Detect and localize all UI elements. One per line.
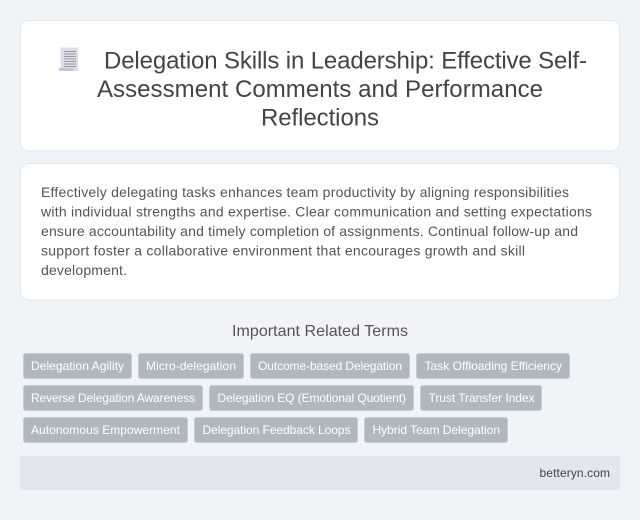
tag: Task Offloading Efficiency: Task Offloading Efficiency [424, 359, 562, 373]
tag: Hybrid Team Delegation [364, 418, 508, 442]
tag: Outcome-based Delegation [250, 354, 410, 378]
icon: document scroll [59, 48, 78, 71]
heading: important related terms: Important Related Terms [232, 323, 408, 340]
footer: site name: betteryn.com [540, 466, 610, 480]
text block: description: with individual strengths and expertise. Clear communication and setting expectations [40, 204, 592, 220]
tag: Delegation Agility: Delegation Agility [31, 359, 124, 373]
tag list [24, 354, 570, 442]
tag: Reverse Delegation Awareness [24, 386, 202, 410]
footer [20, 456, 620, 490]
tag: Hybrid Team Delegation: Hybrid Team Delegation [372, 423, 500, 437]
panel: title card [20, 20, 620, 151]
tag: Autonomous Empowerment [24, 418, 188, 442]
tag: Delegation EQ (Emotional Quotient) [210, 386, 414, 410]
tag: Reverse Delegation Awareness: Reverse Delegation Awareness [31, 391, 195, 405]
tag: Task Offloading Efficiency [416, 354, 570, 378]
title [97, 48, 587, 132]
text block: description: development. [41, 262, 127, 278]
title: Reflections [261, 104, 379, 132]
tag: Delegation Agility [24, 354, 132, 378]
title: Delegation Skills in Leadership: Effective Self- [104, 48, 587, 74]
tag: Delegation Feedback Loops [194, 418, 358, 442]
panel: description card [20, 164, 620, 300]
text block: description: support foster a collaborative environment that encourages growth and skill [41, 242, 525, 258]
tag: Autonomous Empowerment: Autonomous Empowerment [31, 423, 181, 437]
tag: Trust Transfer Index: Trust Transfer Index [428, 391, 534, 405]
tag: Outcome-based Delegation: Outcome-based Delegation [258, 359, 402, 373]
tag: Trust Transfer Index [420, 386, 542, 410]
tag: Delegation EQ (Emotional Quotient): Delegation EQ (Emotional Quotient) [218, 391, 406, 405]
text block: description [40, 184, 592, 278]
title: Assessment Comments and Performance [97, 76, 543, 103]
text block: description: ensure accountability and timely completion of assignments. Continual follow-up and [41, 223, 578, 239]
tag: Delegation Feedback Loops: Delegation Feedback Loops [202, 423, 350, 437]
text block: description: Effectively delegating tasks enhances team productivity by aligning responsibilities [41, 184, 569, 200]
tag: Micro-delegation: Micro-delegation [146, 359, 236, 373]
tag: Micro-delegation [138, 354, 244, 378]
